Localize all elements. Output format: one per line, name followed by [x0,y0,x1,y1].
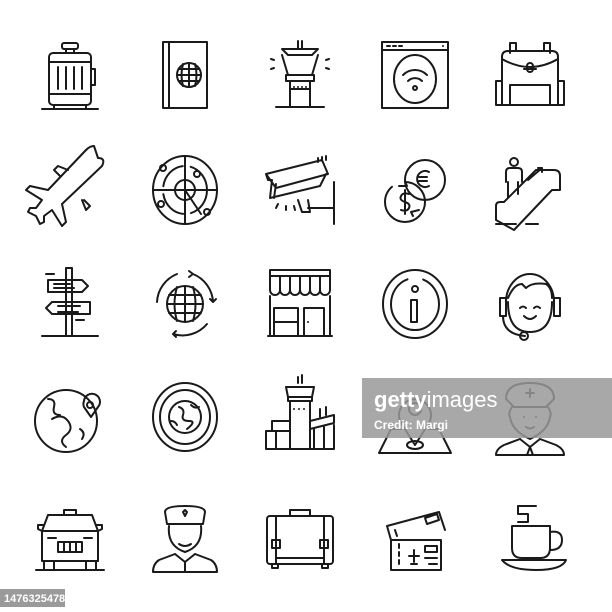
watermark banner [362,378,612,438]
icon: police officer [153,506,217,572]
icon: globe with pin [35,390,100,452]
watermark banner: Credit: Margi [374,418,448,432]
icon: suitcase [42,43,98,109]
icon: briefcase [267,510,333,568]
icon: airplane [26,146,103,226]
watermark banner: gettyimages [374,387,497,412]
icon: backpack [496,43,564,105]
icon: map pin [379,399,451,453]
icon: rotating globe [157,271,216,337]
icon: cctv camera [266,156,334,224]
image id label [0,589,65,607]
icon: currency exchange [385,160,445,222]
icon: browser wifi [382,42,448,108]
icon: radar [153,156,217,224]
icon: airport building [266,375,334,449]
icon: coffee cup [502,506,566,570]
icon: info [383,270,447,338]
icon: taxi [36,510,104,570]
image id label: 1476325478 [4,593,65,605]
icon: tickets [387,512,445,570]
icon: control tower [271,41,329,107]
icon: compass globe [153,383,217,451]
icon: escalator [496,158,560,230]
icon: shop [268,270,332,336]
icon: signpost [42,268,98,336]
icon: support agent [500,274,560,340]
icon: passport [163,42,207,108]
icon: pilot [496,383,564,455]
